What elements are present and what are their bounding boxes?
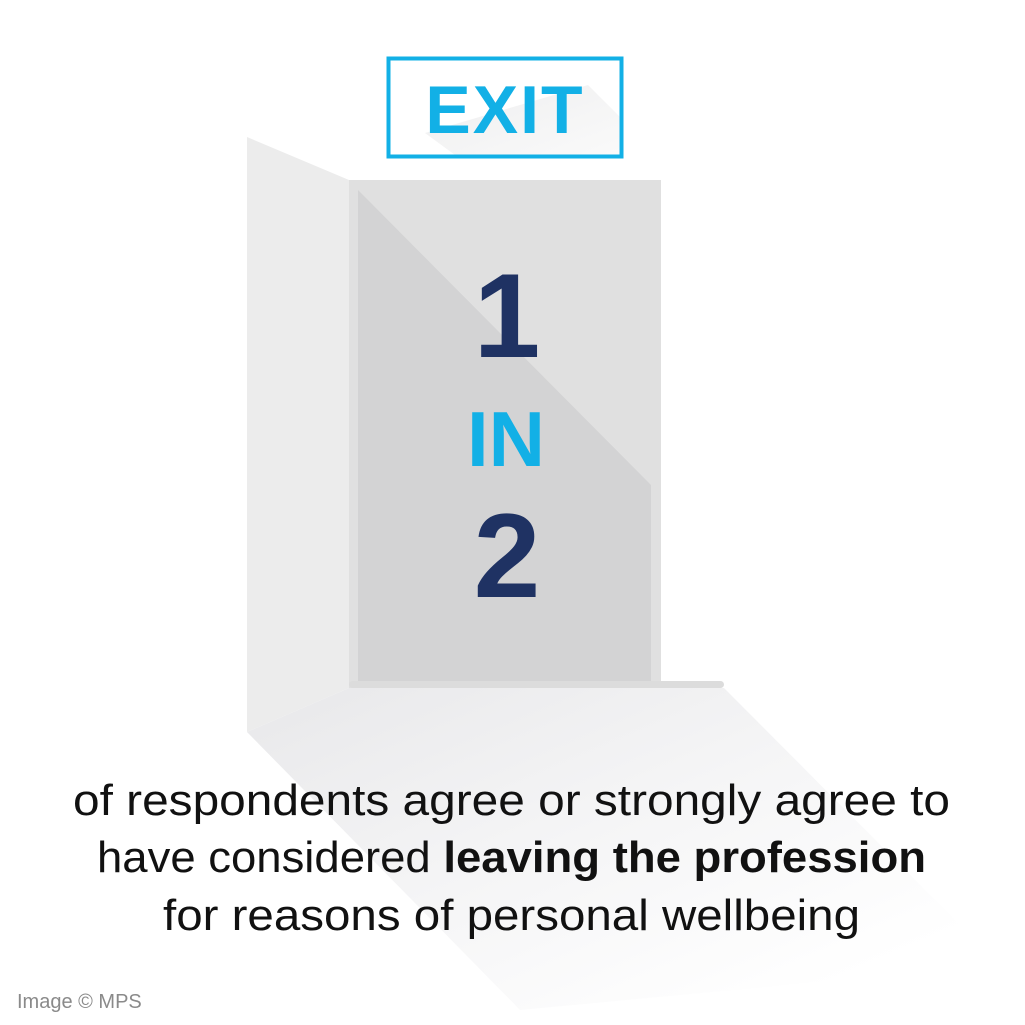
credit: Image © MPS — [17, 991, 142, 1013]
statistic: 1 in 2: IN — [467, 395, 545, 483]
exit sign: EXIT — [425, 72, 585, 148]
description text — [73, 776, 950, 940]
door — [247, 137, 724, 732]
exit sign — [388, 58, 622, 156]
statistic: 1 in 2: 1 — [474, 249, 540, 383]
statistic: 1 in 2 — [467, 249, 545, 623]
description text: for reasons of personal wellbeing — [163, 891, 860, 940]
description text: have considered leaving the profession — [97, 833, 926, 882]
statistic: 1 in 2: 2 — [474, 489, 540, 623]
floor shadow — [247, 688, 1000, 1010]
description text: of respondents agree or strongly agree to — [73, 776, 950, 825]
